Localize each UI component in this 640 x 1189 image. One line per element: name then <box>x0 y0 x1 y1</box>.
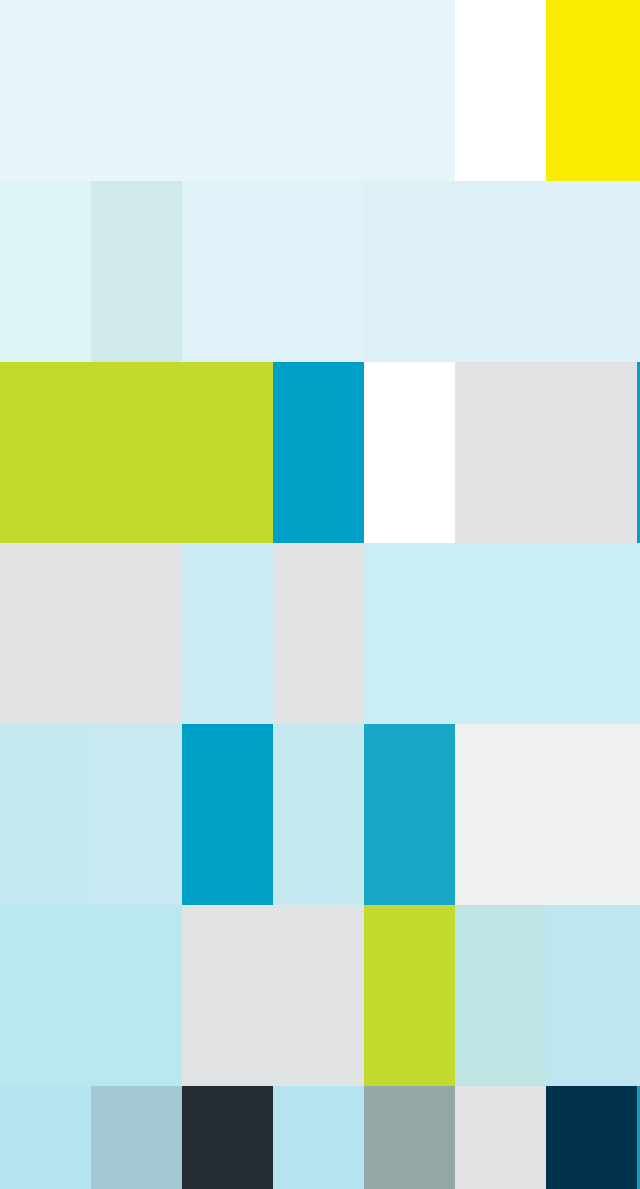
row 7: sky blue and dark tiles <box>0 1086 640 1189</box>
tile: pale blue right span <box>455 181 640 362</box>
tile: grey span <box>182 905 364 1086</box>
tile: sky blue span <box>0 905 182 1086</box>
tile: sky blue <box>546 905 640 1086</box>
tile: soft blue <box>364 724 455 905</box>
tile: grey span <box>0 543 182 724</box>
tile: yellow <box>546 0 640 181</box>
row 6: sky blue, grey and lime tiles <box>0 905 640 1086</box>
tile: lime <box>364 905 455 1086</box>
row 4: grey and light blue tiles <box>0 543 640 724</box>
row 2: pale aqua tiles <box>0 181 640 362</box>
tile: light blue <box>0 724 91 905</box>
tile: charcoal <box>182 1086 273 1189</box>
tile: grey span <box>455 362 637 543</box>
tile: dark navy <box>546 1086 637 1189</box>
tile: pale teal <box>455 905 546 1086</box>
tile: light blue <box>182 543 273 724</box>
tile: pale aqua <box>0 181 91 362</box>
tile: white <box>364 362 455 543</box>
tile: pale blue span <box>0 0 455 181</box>
tile: blue edge sliver <box>637 362 640 543</box>
tile: sky blue <box>0 1086 91 1189</box>
tile: pale blue <box>364 181 455 362</box>
tile: light blue <box>273 724 364 905</box>
tile: muted aqua <box>91 181 182 362</box>
tile: light blue <box>91 724 182 905</box>
tile: blue edge sliver <box>637 1086 640 1189</box>
row 3: lime, blue, white and grey tiles <box>0 362 640 543</box>
tile: light blue span <box>364 543 640 724</box>
tile: off-white span <box>455 724 640 905</box>
row 5: light blue, blue and off-white tiles <box>0 724 640 905</box>
tile: lime span <box>0 362 273 543</box>
tile: blue <box>182 724 273 905</box>
tile: grey <box>273 543 364 724</box>
tile: dusty blue <box>91 1086 182 1189</box>
tile: white <box>455 0 546 181</box>
tile: grey <box>455 1086 546 1189</box>
row 1: pale blue, white and yellow tiles <box>0 0 640 181</box>
tile: sky blue <box>273 1086 364 1189</box>
tile: grey green <box>364 1086 455 1189</box>
tile: blue <box>273 362 364 543</box>
tile: pale blue span <box>182 181 364 362</box>
